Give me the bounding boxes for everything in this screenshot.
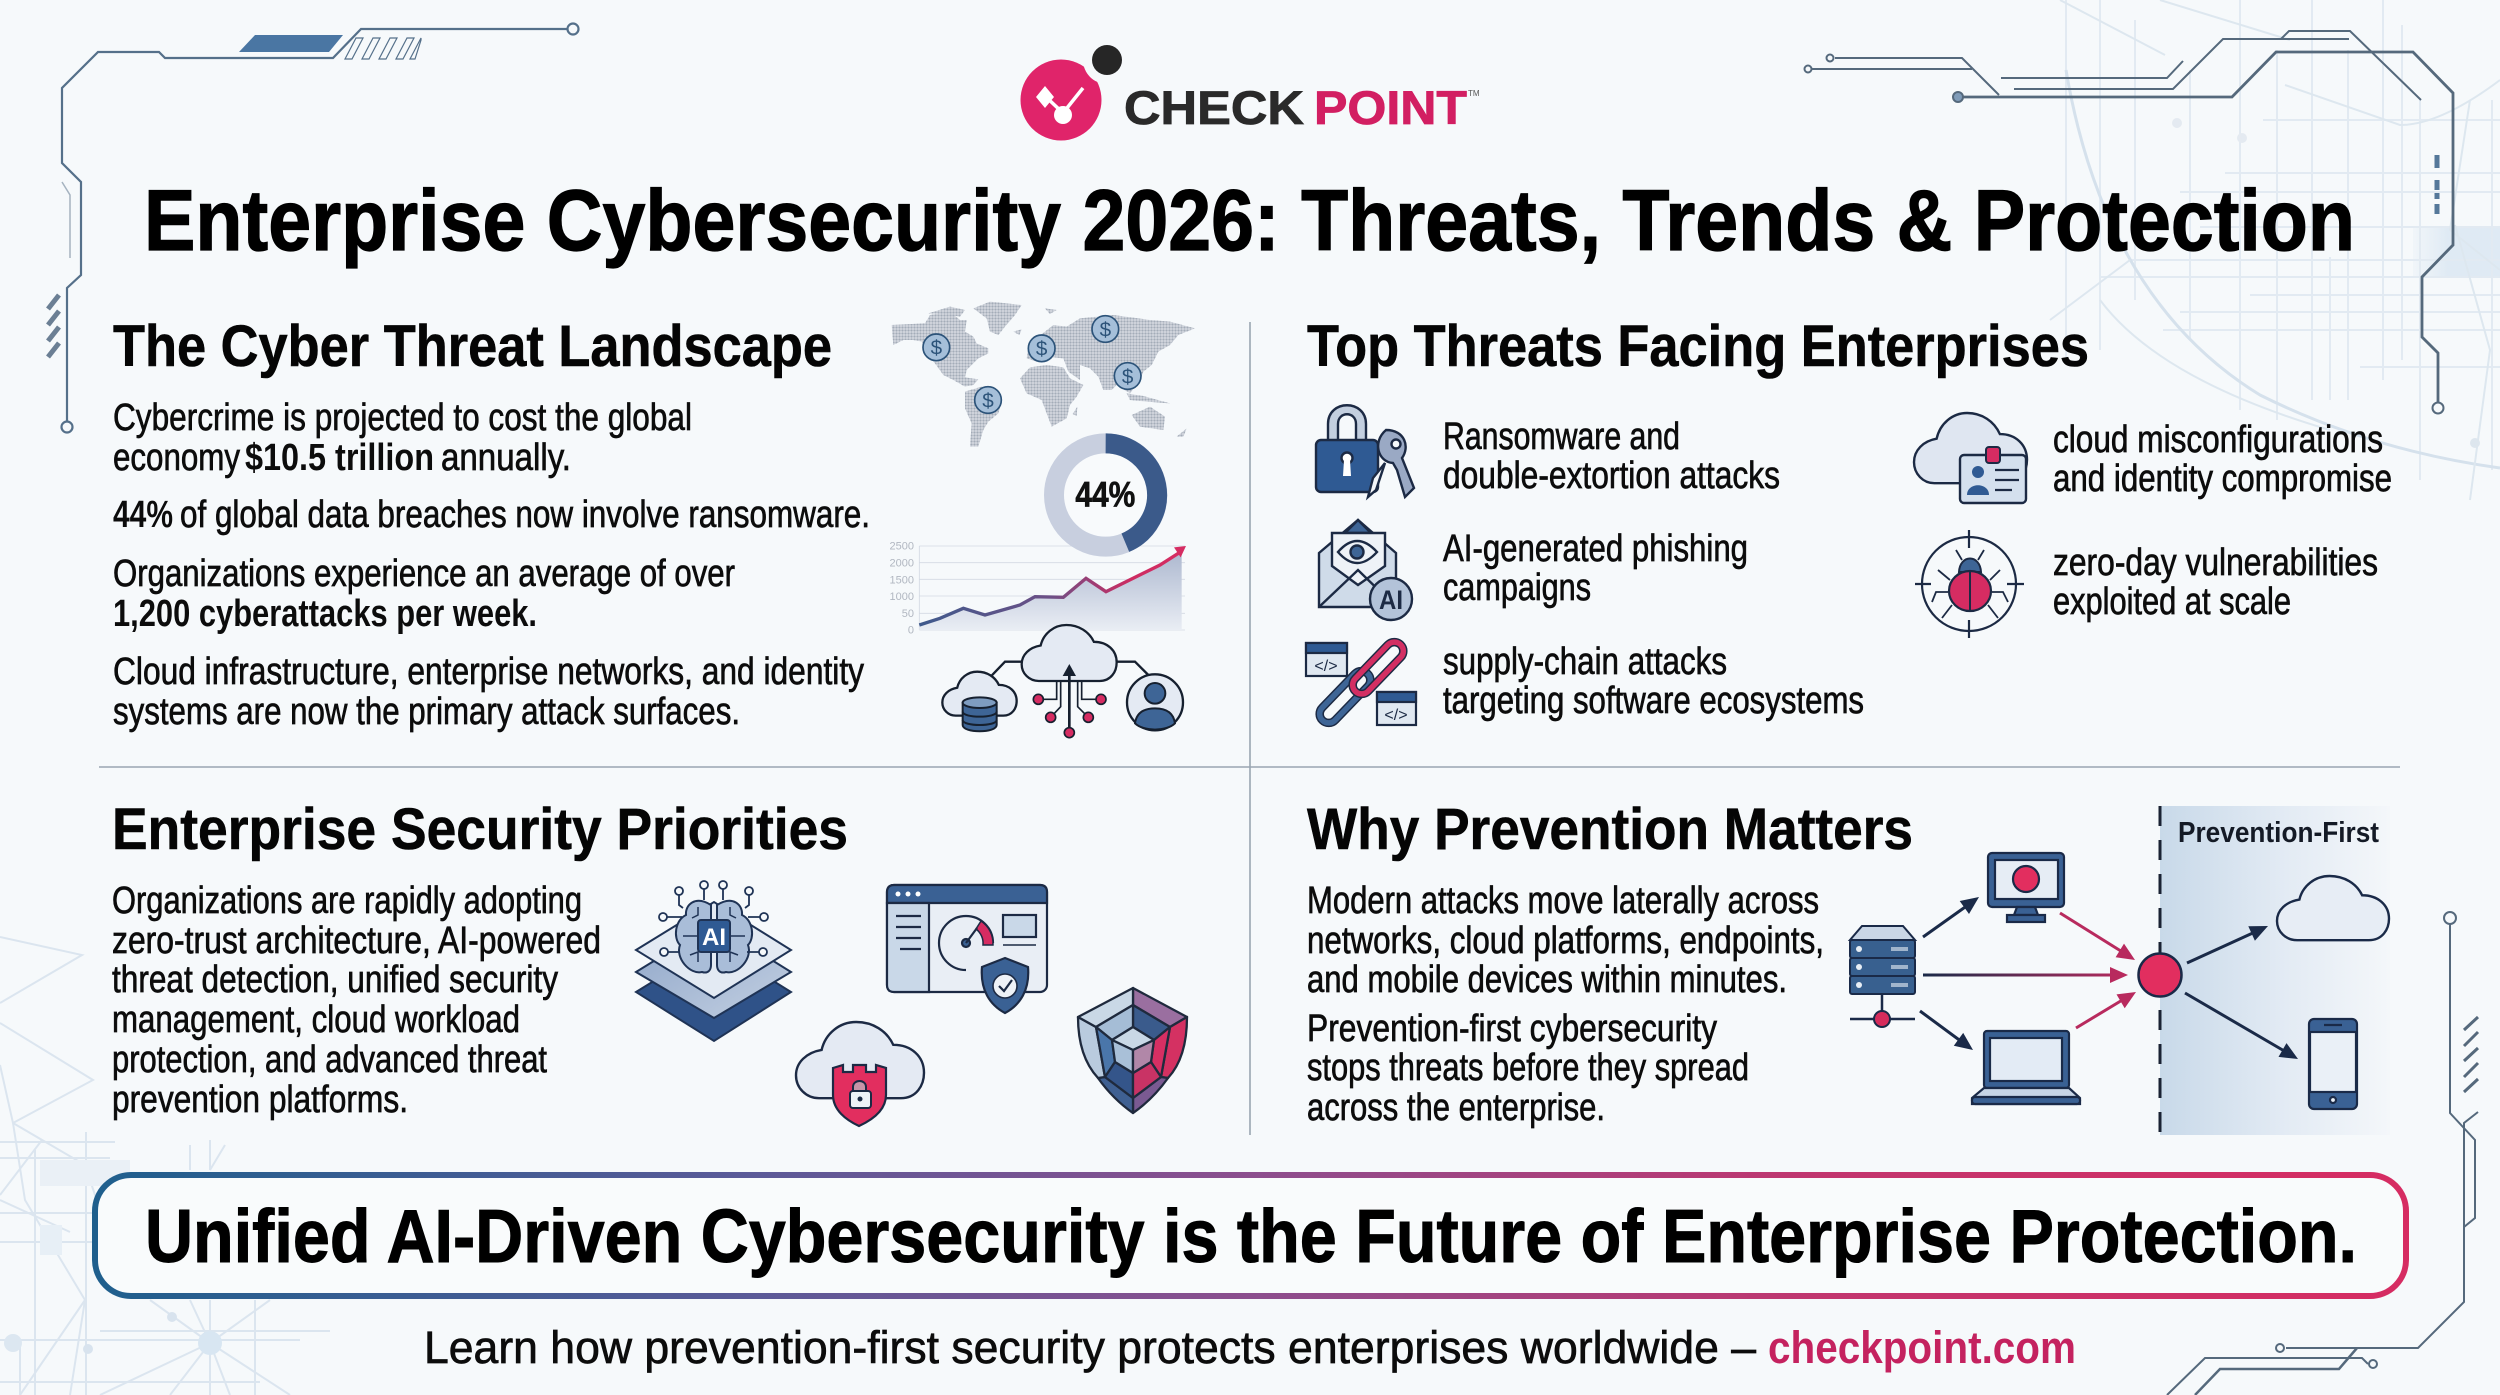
icon: cloud <box>2277 876 2389 940</box>
text: cloud misconfigurations: cloud misconfigurations <box>2053 419 2383 461</box>
text block: threat statistics: $10.5 trillion <box>245 437 434 479</box>
text: ransomware: Ransomware and <box>1443 416 1680 458</box>
heading: top threats: Top Threats Facing Enterprises <box>1307 314 2089 379</box>
text block: lateral movement: Modern attacks move laterally across <box>1307 880 1819 922</box>
line chart <box>890 541 1186 637</box>
text block: lateral movement: and mobile devices within minutes. <box>1307 959 1787 1001</box>
text block: priorities: protection, and advanced threat <box>112 1039 547 1081</box>
text: ransomware <box>1443 416 1780 497</box>
icon: laptop <box>1972 1031 2080 1104</box>
text: supply chain: supply-chain attacks <box>1443 641 1727 683</box>
icon: supply chain links: </> <box>1314 658 1338 675</box>
icon: zero-day bug in target <box>1915 530 2024 638</box>
text: cloud misconfigurations <box>2053 419 2392 500</box>
text block: priorities: zero-trust architecture, AI-powered <box>112 920 601 962</box>
text block: lateral movement <box>1307 880 1824 1129</box>
text block: threat statistics: 1,200 cyberattacks per week. <box>113 593 537 635</box>
world map with dollar markers: $ <box>931 337 943 360</box>
heading: the cyber threat landscape: The Cyber Threat Landscape <box>113 314 832 379</box>
line chart: 2500 <box>890 541 914 553</box>
text: phishing <box>1443 528 1748 609</box>
world map with dollar markers: $ <box>982 389 994 412</box>
line chart: 1500 <box>890 574 914 586</box>
text: zero-day <box>2053 542 2378 623</box>
world map with dollar markers <box>892 302 1195 447</box>
logo: Check Point: POINT <box>1314 81 1467 134</box>
text: phishing: campaigns <box>1443 567 1591 609</box>
icon: server <box>1850 926 1915 1027</box>
icon: red stop node <box>2138 954 2182 996</box>
panel: the cyber threat landscape <box>113 302 1195 738</box>
line chart: 1000 <box>890 591 914 603</box>
text: cloud misconfigurations: and identity compromise <box>2053 458 2392 500</box>
logo: Check Point <box>1020 36 1480 140</box>
text block: priorities <box>112 880 601 1121</box>
text block: threat statistics: systems are now the primary attack surfaces. <box>113 691 740 733</box>
line chart: 50 <box>902 608 914 620</box>
world map with dollar markers: $ <box>1036 338 1048 361</box>
world map with dollar markers: $ <box>1122 365 1134 388</box>
text block: threat statistics: economy <box>113 437 240 479</box>
footer call to action: Learn how prevention-first security protects enterprises worldwide – <box>424 1322 1756 1373</box>
icon: cloud attack surfaces <box>942 625 1183 738</box>
text: phishing: AI-generated phishing <box>1443 528 1748 570</box>
icon: layered defense shield <box>1078 988 1187 1113</box>
icon: supply chain links: </> <box>1384 707 1408 724</box>
heading: why prevention matters: Why Prevention Matters <box>1307 797 1913 862</box>
donut chart: 44% <box>1054 443 1157 547</box>
text: ransomware: double-extortion attacks <box>1443 455 1780 497</box>
banner: unified AI-driven cybersecurity <box>95 1175 2406 1296</box>
text block: lateral movement: stops threats before they spread <box>1307 1047 1749 1089</box>
icon: monitor <box>1988 853 2064 922</box>
panel: enterprise security priorities <box>112 797 1187 1126</box>
heading: enterprise security priorities: Enterprise Security Priorities <box>112 797 848 862</box>
icon: security dashboard <box>887 885 1047 1013</box>
text block: priorities: prevention platforms. <box>112 1079 408 1121</box>
icon: phishing envelope <box>1319 520 1412 620</box>
icon: cloud with identity card <box>1914 413 2027 503</box>
diagram: prevention-first attack flow <box>1850 806 2390 1135</box>
line chart: 0 <box>908 625 914 637</box>
text block: threat statistics: Cybercrime is projected to cost the global <box>113 397 692 439</box>
icon: padlock and key <box>1316 405 1414 497</box>
text: supply chain: targeting software ecosystems <box>1443 680 1864 722</box>
logo: Check Point: TM <box>1468 89 1480 98</box>
world map with dollar markers: $ <box>1100 318 1112 341</box>
text block: lateral movement: across the enterprise. <box>1307 1087 1605 1129</box>
text block: priorities: threat detection, unified security <box>112 959 558 1001</box>
line chart: 2000 <box>890 557 914 569</box>
text: supply chain <box>1443 641 1864 722</box>
panel: top threats facing enterprises <box>1306 314 2392 727</box>
text block: lateral movement: networks, cloud platforms, endpoints, <box>1307 920 1824 962</box>
graphics: landscape visuals <box>890 302 1195 738</box>
footer call to action: checkpoint.com <box>1768 1322 2076 1373</box>
circuit trace: top left <box>48 24 578 432</box>
text block: threat statistics <box>113 397 870 733</box>
text block: lateral movement: Prevention-first cybersecurity <box>1307 1008 1717 1050</box>
arrowheads <box>1954 897 2298 1059</box>
prevention-first zone <box>2160 806 2390 1135</box>
text block: threat statistics: annually. <box>441 437 571 479</box>
icon: phishing envelope: AI <box>1379 585 1403 615</box>
icon: phone <box>2309 1019 2357 1109</box>
panel: why prevention matters <box>1307 797 2390 1135</box>
text: zero-day: zero-day vulnerabilities <box>2053 542 2378 584</box>
text: zero-day: exploited at scale <box>2053 581 2291 623</box>
background network: top right <box>2050 0 2500 500</box>
circuit trace: right and bottom right <box>2167 912 2478 1395</box>
text block: priorities: management, cloud workload <box>112 999 520 1041</box>
text block: priorities: Organizations are rapidly adopting <box>112 880 582 922</box>
icon: cloud with red shield and lock <box>796 1022 924 1126</box>
text block: threat statistics: Cloud infrastructure, enterprise networks, and identity <box>113 651 864 693</box>
text block: threat statistics: 44% <box>113 494 173 536</box>
icon: AI brain on layers: AI <box>702 924 726 951</box>
arrows: lateral movement <box>1920 905 2286 1052</box>
logo: Check Point: CHECK <box>1124 81 1304 134</box>
section dividers <box>99 322 2400 1135</box>
circuit trace: top right <box>1804 31 2453 414</box>
text block: threat statistics: of global data breaches now involve ransomware. <box>180 494 870 536</box>
icon: supply chain links <box>1306 638 1416 727</box>
donut chart: 44%: 44% <box>1075 476 1135 515</box>
text block: threat statistics: Organizations experience an average of over <box>113 553 735 595</box>
background network: bottom left <box>0 937 330 1395</box>
icon: AI brain on layers <box>636 881 791 1041</box>
prevention-first zone: Prevention-First <box>2178 817 2379 849</box>
